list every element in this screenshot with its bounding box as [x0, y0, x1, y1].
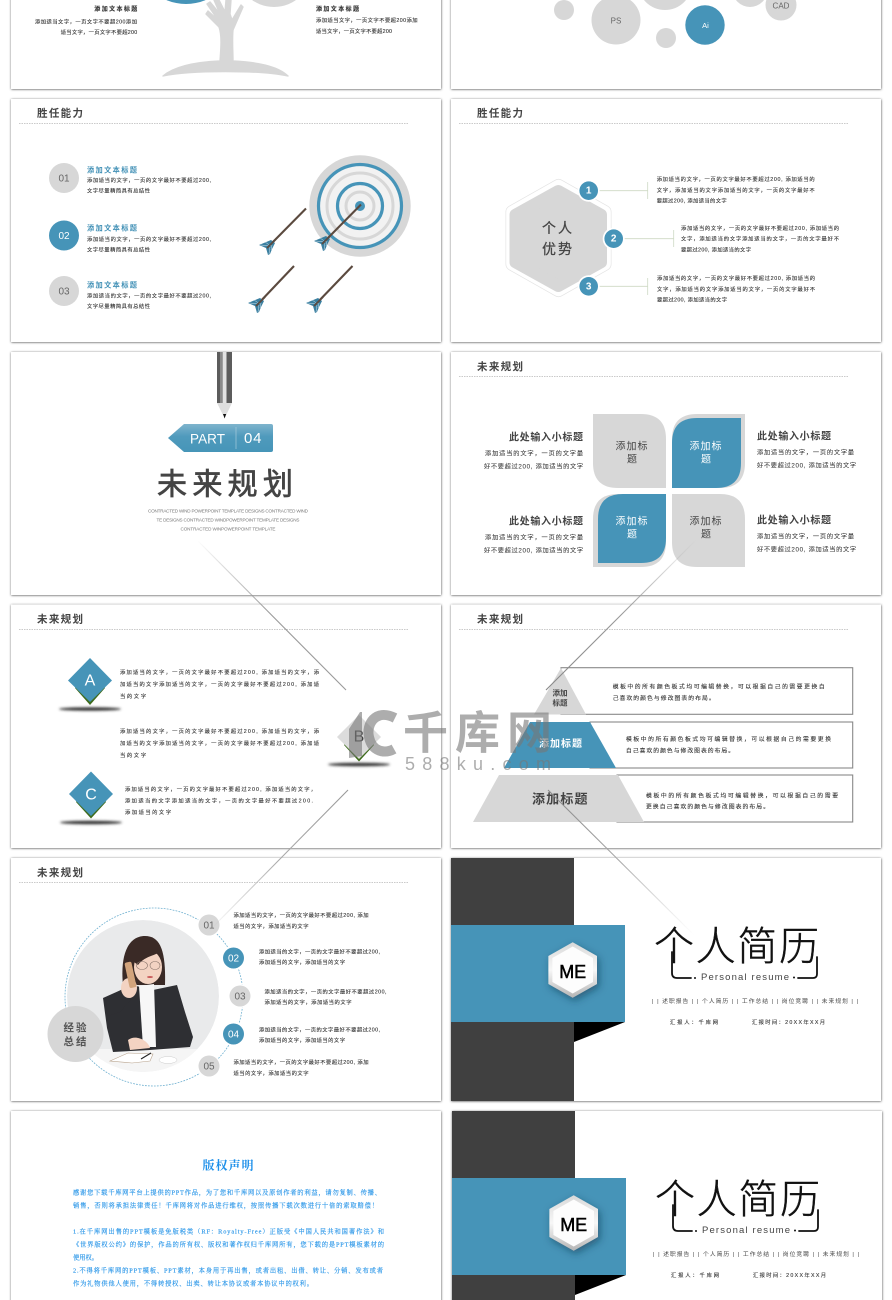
text block: left title and description: 添加适当文字，一页文字不要超200添加 [35, 18, 137, 26]
callout 2: 要超过200, 添加适当的文字 [681, 246, 751, 254]
text block: copyright terms: 销售，否则将承担法律责任！千库网将对作品进行维权，按照传播下载次数进行十倍的索取赔偿！ [73, 1200, 378, 1210]
bubble chart: Ai [702, 21, 709, 30]
bubble chart: PS [611, 16, 621, 26]
logo title: Personal resume [702, 1225, 790, 1236]
icon: pencil [217, 352, 232, 418]
text block: top-right: 添加适当的文字，一页的文字最 [757, 448, 854, 456]
icon: arrow [248, 266, 294, 313]
text block: bottom-left: 添加适当的文字，一页的文字最 [485, 534, 583, 542]
item 01 [197, 911, 368, 937]
item 01: 文字尽量精简具有总结性 [87, 186, 151, 194]
dashed ring [65, 908, 243, 1086]
watermark: diagonal lines and 588ku logo: 588ku.com [405, 754, 551, 774]
item 01: 01 [203, 920, 215, 932]
panel: top-right slide, software bubbles [451, 0, 881, 89]
badge: ME hexagon: ME [560, 1215, 587, 1235]
subtitle: TE DESIGNS CONTRACTED WINDPOWERPOINT TEMPLATE DESIGNS [156, 518, 300, 522]
item 02: 文字尽量精简具有总结性 [87, 246, 151, 254]
item B: B [354, 728, 364, 746]
callout 2 [603, 224, 840, 254]
item 01: 01 [58, 174, 70, 184]
bubble chart: CAD [773, 2, 790, 10]
badge: ME hexagon [549, 1195, 598, 1251]
icon: arrow [259, 208, 306, 255]
text block: right title and description: 适当文字，一页文字不要超200 [316, 27, 392, 35]
banner: part 04 [168, 424, 273, 452]
text block: top-right: 此处输入小标题 [757, 430, 831, 442]
item 01 [49, 163, 211, 194]
heading: 未来规划 [477, 360, 523, 373]
logo title: 个人简历 [654, 925, 819, 969]
item C [60, 772, 316, 824]
item A: 当的文字 [120, 692, 146, 700]
text block: top-right [757, 430, 856, 470]
badge: experience summary: 经验 [64, 1021, 88, 1034]
text block: copyright terms [73, 1188, 385, 1288]
item 03: 03 [58, 286, 70, 298]
text block: left title and description [35, 5, 137, 36]
text block: left title and description: 适当文字，一页文字不要超200 [61, 28, 137, 36]
panel: competency, target [11, 99, 441, 342]
pyramid row 1: 添加 [552, 688, 568, 698]
callout 3: 3 [586, 281, 592, 292]
banner: part 04: PART [190, 432, 225, 446]
pyramid row 1: 标题 [552, 698, 568, 708]
callout 1: 要超过200, 添加适当的文字 [657, 196, 727, 204]
text block: top-left: 添加适当的文字，一页的文字最 [485, 450, 583, 458]
item 01: 添加适当的文字，一页的文字最好不要超过200, [87, 176, 211, 184]
callout 3: 添加适当的文字，一页的文字最好不要超过200, 添加适当的 [657, 274, 815, 282]
pyramid row 2: 模板中的所有颜色板式均可编辑替换，可以根据自己的需要更换 [626, 735, 831, 743]
heading: 未来规划 [477, 612, 523, 626]
petal: bottom-right gray [672, 494, 745, 567]
heading: 胜任能力 [37, 106, 83, 120]
text block: left title and description: 添加文本标题 [94, 5, 137, 13]
heading: 未来规划 [37, 866, 83, 879]
reporter info [670, 1018, 825, 1026]
watermark: diagonal lines and 588ku logo [197, 540, 696, 935]
pyramid row 2 [504, 722, 853, 768]
photo: businesswoman on the phone [67, 920, 219, 1072]
item C: 添加适当的文字，一页的文字最好不要超过200, 添加适当的文字， [125, 785, 316, 793]
panel: resume cover slide [452, 1111, 882, 1300]
petal: bottom-right gray: 添加标 [690, 514, 722, 528]
item B: 加适当的文字添加适当的文字，一页的文字最好不要超过200, 添加适 [120, 739, 320, 747]
petal: bottom-right gray: 题 [701, 528, 711, 540]
item 04: 04 [228, 1030, 239, 1040]
text block: bottom-left: 此处输入小标题 [509, 514, 583, 528]
subtitle: CONTRACTED WIND POWERPOINT TEMPLATE DESIGNS CONTRACTED WIND [148, 508, 309, 514]
reporter info: 汇报人：千库网 [671, 1271, 719, 1279]
heading: 版权声明 [202, 1158, 254, 1172]
item C: 添加适当的文字添加适当的文字，一页的文字最好不要超过200. [125, 796, 313, 804]
item A: 加适当的文字添加适当的文字，一页的文字最好不要超过200, 添加适 [120, 680, 320, 688]
reporter info [671, 1271, 826, 1279]
icon: arrow [306, 266, 352, 313]
item 01: 添加适当的文字，一页的文字最好不要超过200, 添加 [234, 911, 368, 919]
item 04: 添加适当的文字，添加适当的文字 [259, 1036, 345, 1044]
heading: 胜任能力 [477, 106, 523, 120]
text block: top-left: 好不要超过200, 添加适当的文字 [484, 462, 583, 470]
item B [120, 715, 390, 766]
icon: arrow in target [314, 204, 361, 251]
subtitle [148, 508, 309, 532]
callout 3: 要超过200, 添加适当的文字 [657, 296, 727, 304]
item A [59, 658, 320, 711]
bubble chart [554, 0, 796, 48]
panel: future plan, four petals [451, 352, 881, 595]
item 05: 添加适当的文字，一页的文字最好不要超过200, 添加 [234, 1058, 368, 1066]
blue band [451, 925, 625, 1042]
item 03: 03 [234, 992, 246, 1002]
callout 1: 添加适当的文字，一页的文字最好不要超过200, 添加适当的 [657, 175, 815, 183]
item 05 [197, 1054, 368, 1078]
badge: experience summary: 总结 [64, 1035, 88, 1048]
pyramid row 2: 自己喜欢的颜色与修改图表的布局。 [626, 746, 734, 754]
hexagon: personal strengths: 个人 [542, 220, 574, 236]
title: 未来规划 [157, 468, 293, 502]
callout 3 [578, 274, 816, 304]
petal: top-left gray: 添加标 [616, 440, 648, 452]
text block: top-left [484, 430, 583, 470]
dark column [452, 1111, 575, 1300]
item 03: 添加适当的文字，添加适当的文字 [264, 998, 352, 1006]
callout 1: 1 [586, 186, 592, 197]
text block: top-left: 此处输入小标题 [509, 430, 583, 444]
callout 1: 文字，添加适当的文字添加适当的文字，一页的文字最好不 [657, 186, 815, 194]
banner: part 04: 04 [244, 430, 262, 447]
callout 2: 文字，添加适当的文字添加适当的文字，一页的文字最好不 [681, 234, 840, 242]
item 02: 添加适当的文字，添加适当的文字 [259, 958, 345, 966]
icon: hand tree [136, 0, 312, 76]
pyramid row 3: 模板中的所有颜色板式均可编辑替换，可以根据自己的需要 [646, 792, 838, 800]
panel: future plan, ABC diamonds [11, 604, 441, 848]
item 03: 添加适当的文字，一页的文字最好不要超过200, [264, 988, 386, 996]
text block: copyright terms: 使用权。 [73, 1252, 98, 1262]
panel: future plan, pyramid [451, 604, 881, 848]
badge: ME hexagon: ME [559, 962, 586, 982]
panel: top-left slide, hand tree [11, 0, 441, 89]
pyramid row 3 [473, 775, 853, 822]
callout 1 [578, 175, 815, 204]
item 03: 文字尽量精简具有总结性 [87, 302, 151, 310]
item 03 [49, 276, 211, 310]
item 02 [49, 220, 211, 254]
text block: bottom-right: 添加适当的文字，一页的文字最 [757, 532, 854, 540]
text block: right title and description [316, 5, 418, 35]
text block: right title and description: 添加适当文字，一页文字不要超200添加 [316, 16, 418, 24]
item 02: 添加文本标题 [87, 224, 137, 232]
heading: 未来规划 [37, 612, 83, 626]
petal: bottom-left blue: 添加标 [616, 514, 648, 528]
panel: competency, personal strengths [451, 99, 881, 342]
item 01: 适当的文字，添加适当的文字 [234, 922, 308, 930]
text block: copyright terms: 作为礼物供他人使用，不得转授权、出卖、转让本协议或者本协议中的权利。 [73, 1278, 313, 1288]
petal: bottom-left blue [593, 494, 666, 567]
subtitle: CONTRACTED WINPOWERPOINT TEMPLATE [180, 526, 276, 532]
text block: copyright terms: 《世界版权公约》的保护，作品的所有权、版权和著作权归千库网所有，您下载的是PPT模板素材的 [73, 1240, 385, 1248]
text block: right title and description: 添加文本标题 [316, 5, 359, 13]
item 02: 添加适当的文字，一页的文字最好不要超过200, [87, 235, 211, 243]
text block: copyright terms: 感谢您下载千库网平台上提供的PPT作品，为了您和千库网以及原创作者的利益，请勿复制、传播、 [73, 1188, 381, 1196]
petal: top-right blue: 添加标 [690, 440, 722, 452]
item 03 [228, 984, 386, 1008]
item 01: 添加文本标题 [87, 166, 137, 174]
item 05: 05 [203, 1062, 215, 1072]
item 04 [222, 1022, 380, 1046]
petal: top-right blue: 题 [701, 454, 711, 466]
petal: top-right blue [672, 414, 745, 488]
item 05: 适当的文字，添加适当的文字 [234, 1069, 308, 1077]
item A: A [85, 672, 96, 690]
item B: 当的文字 [120, 751, 146, 759]
pyramid row 1: 己喜欢的颜色与修改图表的布局。 [613, 694, 715, 702]
petal: top-left gray [593, 414, 666, 488]
pyramid row 1: 模板中的所有颜色板式均可编辑替换，可以根据自己的需要更换自 [613, 682, 825, 690]
hexagon: personal strengths: 优势 [542, 241, 574, 257]
hexagon: personal strengths [512, 186, 604, 290]
panel: resume closing slide [451, 858, 881, 1101]
petal: bottom-left blue: 题 [627, 528, 637, 540]
text block: bottom-left: 好不要超过200, 添加适当的文字 [484, 546, 583, 554]
text block: bottom-right: 此处输入小标题 [757, 514, 831, 526]
icon: target [309, 155, 411, 257]
logo title: 个人简历 [655, 1178, 820, 1222]
badge: experience summary [48, 1006, 104, 1062]
badge: ME hexagon [548, 942, 597, 998]
item C: 添加适当的文字 [125, 808, 171, 816]
text block: copyright terms: 2.不得将千库网的PPT模板、PPT素材，本身用于再出售，或者出租、出借、转让、分销、发布或者 [73, 1266, 384, 1274]
panel: future plan, experience summary [11, 858, 441, 1101]
tags line: | | 述职报告 | | 个人简历 | | 工作总结 | | 岗位竞聘 | | 未来规划 | | [653, 1250, 859, 1258]
panel: copyright notice [11, 1111, 441, 1300]
item 02: 02 [228, 954, 239, 964]
item A: 添加适当的文字，一页的文字最好不要超过200, 添加适当的文字，添 [120, 668, 320, 676]
dark column [451, 858, 574, 1101]
pyramid row 1 [534, 668, 853, 714]
item 03: 添加适当的文字，一页的文字最好不要超过200, [87, 292, 211, 300]
reporter info: 汇报时间：20XX年XX月 [752, 1018, 825, 1026]
callout 2: 添加适当的文字，一页的文字最好不要超过200, 添加适当的 [681, 224, 839, 232]
item 02: 添加适当的文字，一页的文字最好不要超过200, [259, 948, 380, 956]
text block: bottom-right: 好不要超过200, 添加适当的文字 [757, 546, 856, 554]
item 03: 添加文本标题 [87, 280, 137, 290]
text block: copyright terms: 1.在千库网出售的PPT模板是免版税类（RF：Royalty-Free）正版受《中国人民共和国著作法》和 [73, 1226, 384, 1236]
item 02 [222, 946, 380, 970]
item B: 添加适当的文字，一页的文字最好不要超过200, 添加适当的文字，添 [120, 727, 320, 735]
reporter info: 汇报人：千库网 [670, 1018, 718, 1026]
callout 2: 2 [611, 234, 617, 245]
item 02: 02 [58, 231, 70, 242]
blue band [452, 1178, 626, 1295]
watermark: diagonal lines and 588ku logo: 千库网 [403, 708, 552, 758]
logo title: Personal resume [701, 972, 789, 983]
petal: top-left gray: 题 [627, 454, 637, 466]
pyramid row 2: 添加标题 [539, 737, 583, 750]
text block: top-right: 好不要超过200, 添加适当的文字 [757, 462, 856, 470]
text block: bottom-left [484, 514, 583, 554]
item C: C [85, 786, 97, 804]
reporter info: 汇报时间：20XX年XX月 [753, 1271, 826, 1279]
callout 3: 文字，添加适当的文字添加适当的文字，一页的文字最好不 [657, 285, 816, 293]
item 04: 添加适当的文字，一页的文字最好不要超过200, [259, 1026, 380, 1034]
panel: part 04 section cover [11, 352, 441, 595]
text block: bottom-right [757, 514, 856, 554]
tags line: | | 述职报告 | | 个人简历 | | 工作总结 | | 岗位竞聘 | | 未来规划 | | [652, 997, 858, 1005]
pyramid row 3: 更换自己喜欢的颜色与修改图表的布局。 [646, 802, 769, 810]
pyramid row 3: 添加标题 [532, 792, 588, 806]
